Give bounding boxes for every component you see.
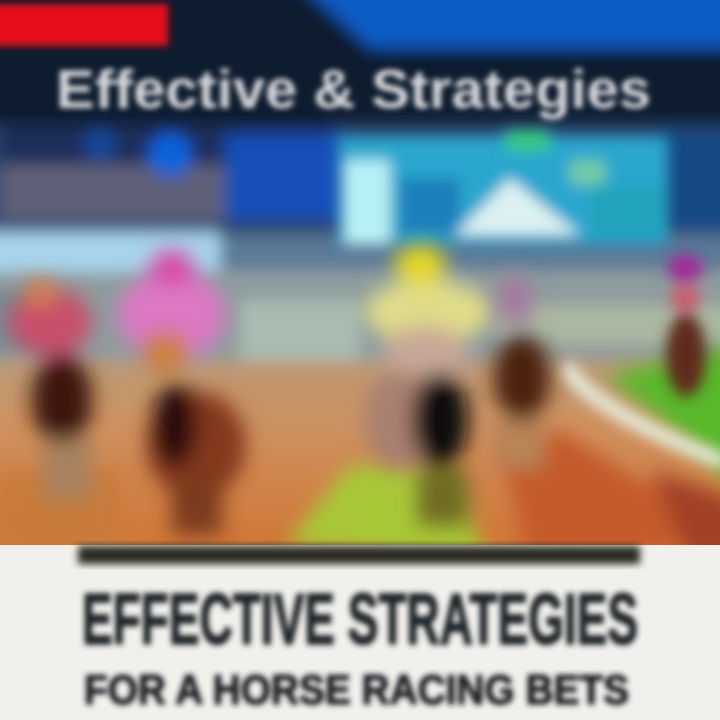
- blue roof band: [285, 0, 720, 48]
- horse 4: [494, 274, 550, 470]
- jumbotron screen: [338, 130, 668, 245]
- horse 5: [666, 254, 706, 397]
- horse 1: [8, 278, 92, 500]
- caption panel: [0, 545, 720, 720]
- caption subheading: FOR A HORSE RACING BETS: [84, 666, 629, 713]
- horse 2: [118, 250, 246, 535]
- background sky and stands: [0, 0, 720, 570]
- white rail: [565, 365, 720, 462]
- red banner: [0, 4, 168, 46]
- dark caption bar: [78, 546, 640, 564]
- photo headline: Effective & Strategies: [56, 58, 651, 120]
- horse 3 center: [364, 245, 492, 525]
- track details: grass and dirt: [0, 345, 720, 560]
